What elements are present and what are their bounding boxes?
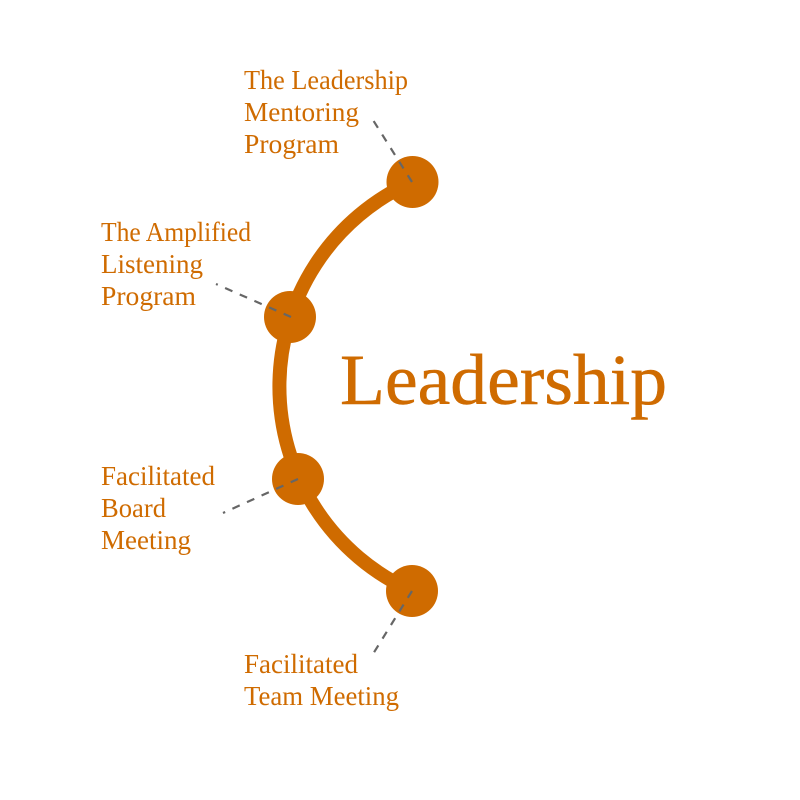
- label: The Leadership Mentoring Program: [244, 65, 408, 159]
- label: The Amplified Listening Program: The Amplified: [101, 217, 251, 247]
- title: Leadership: Leadership: [340, 340, 667, 420]
- label: Facilitated Team Meeting: [244, 649, 399, 711]
- node: upper middle: [264, 291, 316, 343]
- connector: bottom: [373, 591, 412, 654]
- label: Facilitated Board Meeting: [101, 461, 215, 555]
- node: top: [386, 156, 438, 208]
- label: Facilitated Board Meeting: Board: [101, 493, 166, 523]
- label: Facilitated Team Meeting: Facilitated: [244, 649, 358, 679]
- label: The Leadership Mentoring Program: The Leadership: [244, 65, 408, 95]
- label: The Amplified Listening Program: Program: [101, 281, 196, 311]
- label: The Amplified Listening Program: Listening: [101, 249, 203, 279]
- label: The Amplified Listening Program: [101, 217, 251, 311]
- node: lower middle: [272, 453, 324, 505]
- label: Facilitated Board Meeting: Facilitated: [101, 461, 215, 491]
- label: Facilitated Board Meeting: Meeting: [101, 525, 191, 555]
- node: bottom: [386, 565, 438, 617]
- connector: upper middle: [216, 284, 291, 317]
- label: The Leadership Mentoring Program: Mentoring: [244, 97, 359, 127]
- arc timeline: [279, 182, 412, 591]
- connector: top: [373, 120, 412, 182]
- connector: lower middle: [223, 479, 298, 513]
- label: The Leadership Mentoring Program: Program: [244, 129, 339, 159]
- label: Facilitated Team Meeting: Team Meeting: [244, 681, 399, 711]
